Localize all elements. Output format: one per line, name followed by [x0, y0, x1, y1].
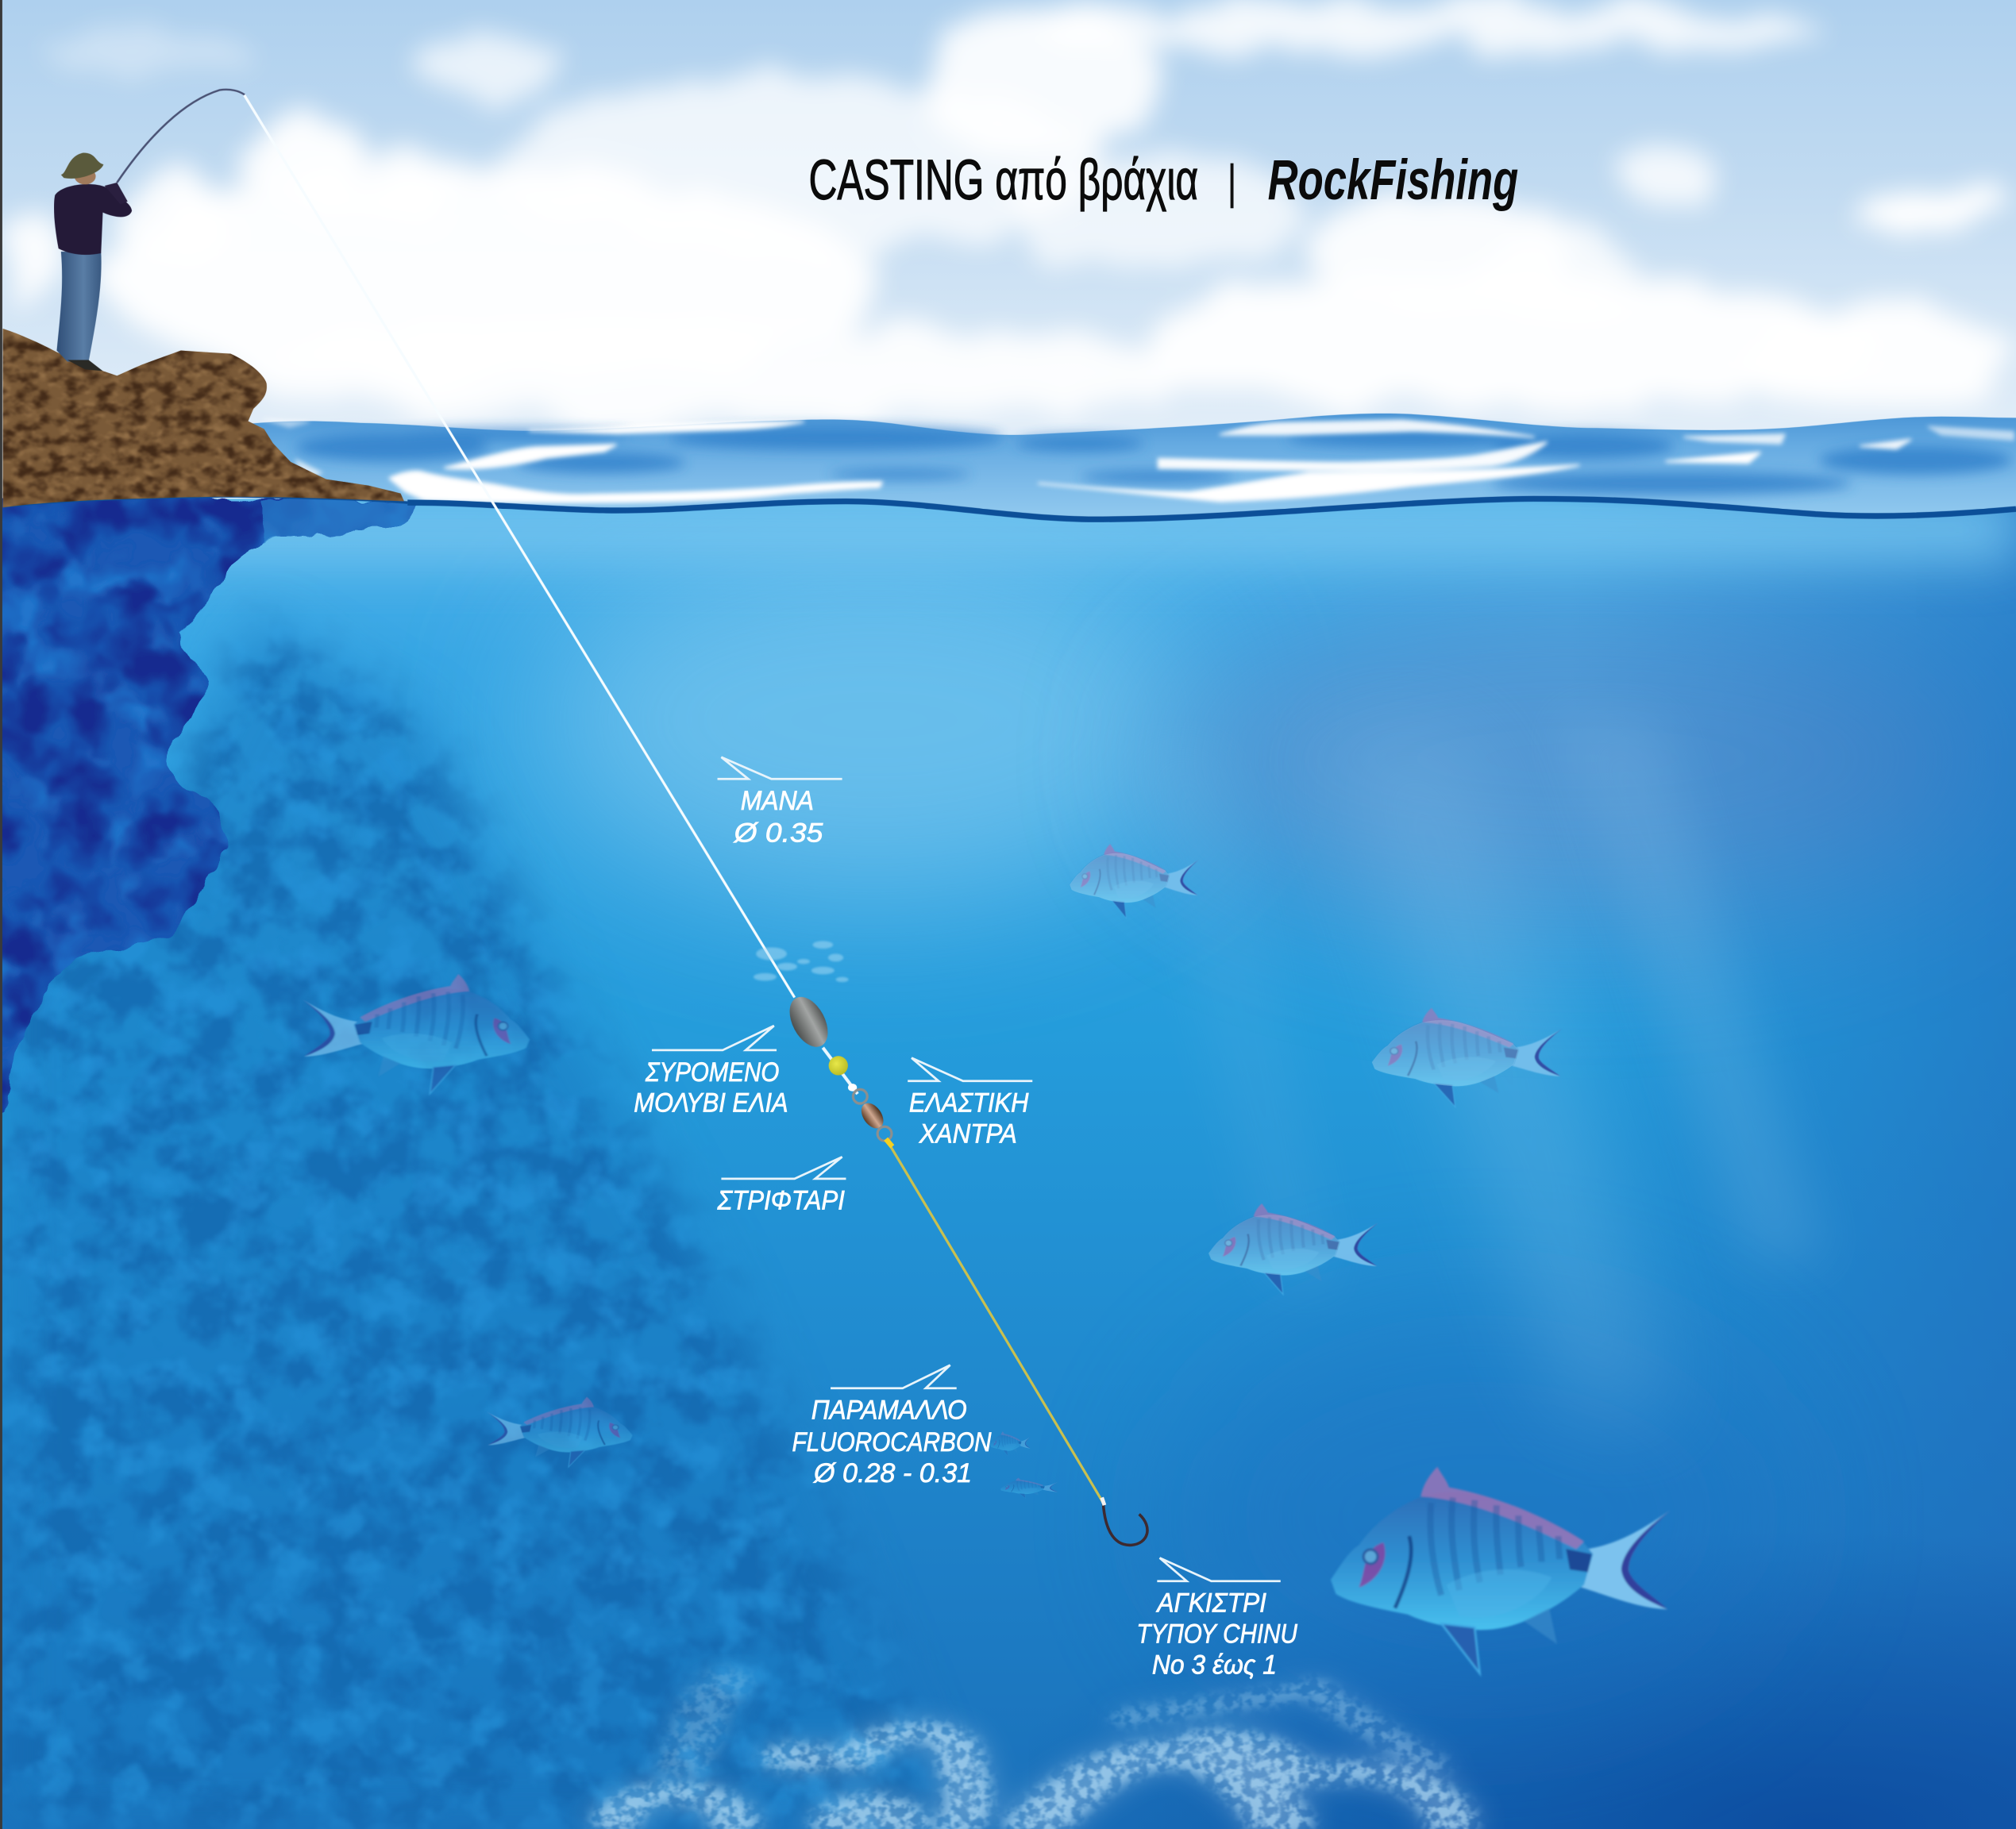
sliding olive sinker: [782, 991, 835, 1053]
fish: middle right: [1372, 1008, 1562, 1107]
callout: hook: Νο 3 έως 1: [1152, 1650, 1277, 1680]
fishing line: [245, 95, 795, 998]
fisherman: [54, 90, 245, 371]
title: CASTING από βράχια: [809, 149, 1198, 212]
callout: hook: ΑΓΚΙΣΤΡΙ: [1155, 1588, 1266, 1619]
callout: main line: Ø 0.35: [734, 818, 823, 849]
left edge strip: [0, 0, 2, 1829]
darker wave troughs: [295, 427, 2012, 495]
coral seabed: [615, 1681, 1451, 1826]
fish: lower middle: [1208, 1203, 1378, 1295]
rock with fisherman: [3, 90, 404, 507]
callout: main line: ΜΑΝΑ: [741, 786, 814, 816]
dark rock cliff underwater: [0, 494, 417, 1119]
fluorocarbon leader: [889, 1143, 1103, 1503]
callout: main line: [718, 757, 842, 849]
elastic bead: [829, 1056, 848, 1076]
callout: fluorocarbon leader: ΠΑΡΑΜΑΛΛΟ: [811, 1396, 967, 1426]
underwater background: [0, 499, 2016, 1829]
small white bead: [848, 1084, 857, 1092]
hook: [1103, 1503, 1147, 1545]
callout: sliding olive sinker: [634, 1026, 788, 1119]
reef wall: [2, 610, 916, 1829]
sky: [0, 0, 2016, 514]
clouds: [2, 0, 2012, 424]
callout: swivel: [717, 1157, 846, 1216]
callout: elastic bead: ΕΛΑΣΤΙΚΗ: [909, 1088, 1029, 1119]
fish: left over reef: [303, 974, 530, 1094]
callout: sliding olive sinker: ΜΟΛΥΒΙ ΕΛΙΑ: [634, 1088, 788, 1119]
waterline: [407, 499, 2016, 519]
line below sinker: [823, 1048, 858, 1094]
fishing rod: [117, 90, 245, 183]
callout: fluorocarbon leader: FLUOROCARBON: [792, 1427, 992, 1457]
callout: hook: [1136, 1558, 1297, 1680]
fish: far left, faint behind the label: [990, 1431, 1031, 1456]
callout: elastic bead: [908, 1058, 1032, 1149]
rig: sinker, bead, swivel, leader and hook: [754, 941, 1147, 1545]
callout: fluorocarbon leader: [792, 1365, 992, 1488]
callout: elastic bead: ΧΑΝΤΡΑ: [919, 1119, 1017, 1149]
white foam streaks: [264, 419, 2014, 502]
callout: sliding olive sinker: ΣΥΡΟΜΕΝΟ: [645, 1057, 779, 1088]
fish: large foreground: [1331, 1467, 1670, 1673]
fish: small faint near hook: [1000, 1478, 1058, 1499]
bubbles around the sinker: [754, 941, 849, 982]
rock: [3, 329, 404, 507]
fish: top centre: [1070, 844, 1199, 918]
wave surface: [4, 414, 2016, 519]
swivel: [853, 1089, 892, 1141]
callout: fluorocarbon leader: Ø 0.28 - 0.31: [813, 1458, 972, 1488]
fish: lower left over reef: [487, 1397, 633, 1467]
callout: hook: ΤΥΠΟΥ CHINU: [1136, 1619, 1297, 1649]
title: RockFishing: [1268, 149, 1518, 212]
callout: swivel: ΣΤΡΙΦΤΑΡΙ: [717, 1186, 845, 1216]
